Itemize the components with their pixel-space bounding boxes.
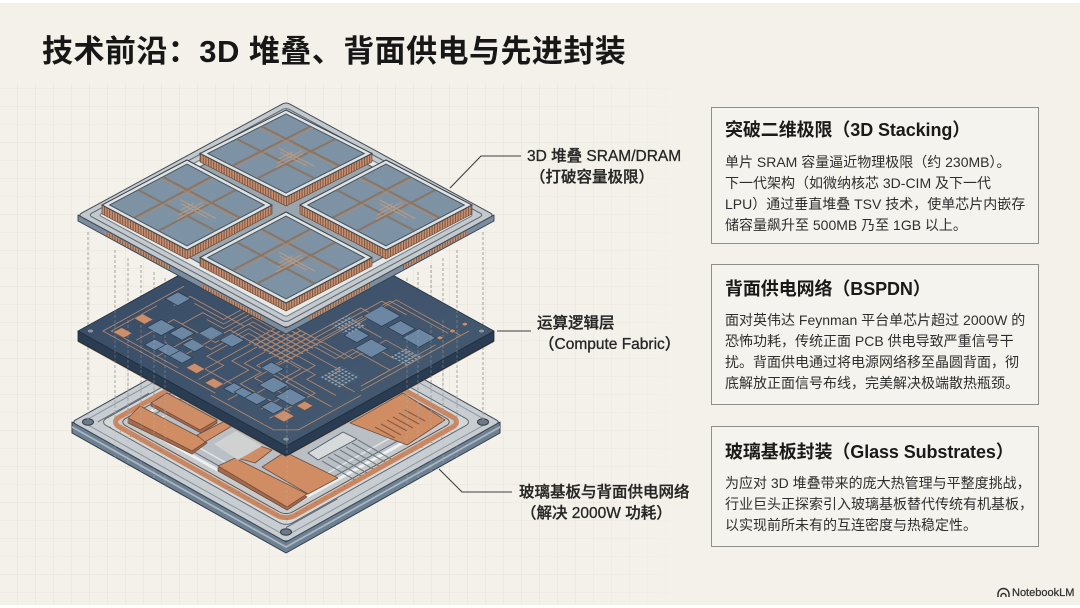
small memory blocks — [330, 315, 367, 336]
leader line: SRAM label — [450, 156, 521, 188]
background grid — [0, 83, 632, 605]
dashed lines passing in front of lower layers — [115, 310, 457, 525]
chip: back — [200, 110, 372, 206]
label: compute fabric: （Compute Fabric） — [539, 336, 680, 352]
copper power ring — [111, 324, 461, 520]
body text — [725, 154, 1025, 233]
substrate side wall — [72, 422, 500, 553]
body text — [725, 312, 1025, 391]
silver connector — [308, 432, 357, 460]
icon: NotebookLM logo — [998, 588, 1009, 597]
central copper bump grid — [249, 322, 323, 363]
body text: 恐怖功耗，传统正面 PCB 供电导致严重信号干 — [725, 333, 1014, 349]
label: SRAM/DRAM: （打破容量极限） — [530, 168, 654, 186]
chip components — [113, 242, 438, 422]
fabric top surface — [78, 216, 494, 446]
body text: 下一代架构（如微纳核芯 3D-CIM 及下一代 — [725, 175, 991, 191]
body text — [725, 475, 1033, 533]
inner tray — [100, 318, 472, 526]
label: compute fabric — [537, 314, 680, 353]
heading: 背面供电网络（BSPDN） — [725, 279, 931, 299]
label: glass substrate: 玻璃基板与背面供电网络 — [519, 484, 690, 500]
body text: 以实现前所未有的互连密度与热稳定性。 — [725, 517, 977, 533]
label: compute fabric: 运算逻辑层 — [537, 314, 615, 332]
mounting holes — [82, 419, 488, 535]
mounting vias — [86, 220, 486, 442]
label: SRAM/DRAM — [527, 148, 681, 186]
layer: glass substrate and backside power — [72, 302, 500, 553]
body text: LPU）通过垂直堆叠 TSV 技术，使单芯片内嵌存 — [725, 196, 1025, 212]
fabric side wall — [78, 331, 494, 457]
panel: glass substrates — [711, 426, 1039, 547]
label: glass substrate: （解决 2000W 功耗） — [521, 504, 672, 522]
copper segments on ring — [110, 427, 462, 519]
plate side wall — [78, 215, 494, 334]
chip: left — [102, 160, 272, 259]
body text: 单片 SRAM 容量逼近物理极限（约 230MB）。 — [725, 154, 1010, 170]
chip: front — [200, 212, 372, 311]
panel: BSPDN — [711, 264, 1039, 405]
body text: 储容量飙升至 500MB 乃至 1GB 以上。 — [725, 217, 967, 233]
logo text: NotebookLM — [1012, 587, 1074, 599]
body text: 面对英伟达 Feynman 平台单芯片超过 2000W 的 — [725, 312, 1025, 328]
chip: right — [300, 160, 472, 259]
copper strips on plate side — [105, 231, 467, 321]
heading: 突破二维极限（3D Stacking） — [725, 120, 970, 140]
bottom edge strip — [0, 605, 1080, 608]
substrate top surface — [72, 302, 500, 542]
body text: 为应对 3D 堆叠带来的庞大热管理与平整度挑战， — [725, 475, 1031, 491]
body text: 行业巨头正探索引入玻璃基板替代传统有机基板， — [725, 496, 1033, 512]
copper pads — [128, 393, 445, 510]
leader line: compute label — [497, 330, 531, 332]
copper pads — [111, 313, 313, 424]
heading: 玻璃基板封装（Glass Substrates） — [725, 442, 1014, 462]
leader line: substrate label — [439, 469, 512, 492]
title: 技术前沿：3D 堆叠、背面供电与先进封装 — [42, 34, 626, 69]
dashed alignment lines — [88, 232, 483, 420]
layer: 3D stacked memory — [78, 102, 494, 334]
speckled glass area — [214, 431, 262, 460]
panel: 3D stacking — [711, 107, 1039, 244]
plate top surface — [78, 102, 494, 328]
comb traces on right pad — [375, 410, 425, 438]
body text: 扰。背面供电通过将电源网络移至晶圆背面，彻 — [725, 354, 1019, 370]
body text: 底解放正面信号布线，完美解决极端散热瓶颈。 — [725, 375, 1019, 391]
label: SRAM/DRAM: 3D 堆叠 SRAM/DRAM — [527, 148, 681, 164]
label: glass substrate — [519, 484, 690, 522]
copper traces — [99, 230, 473, 437]
layer: compute fabric — [78, 216, 494, 457]
top edge strip — [0, 0, 1080, 3]
